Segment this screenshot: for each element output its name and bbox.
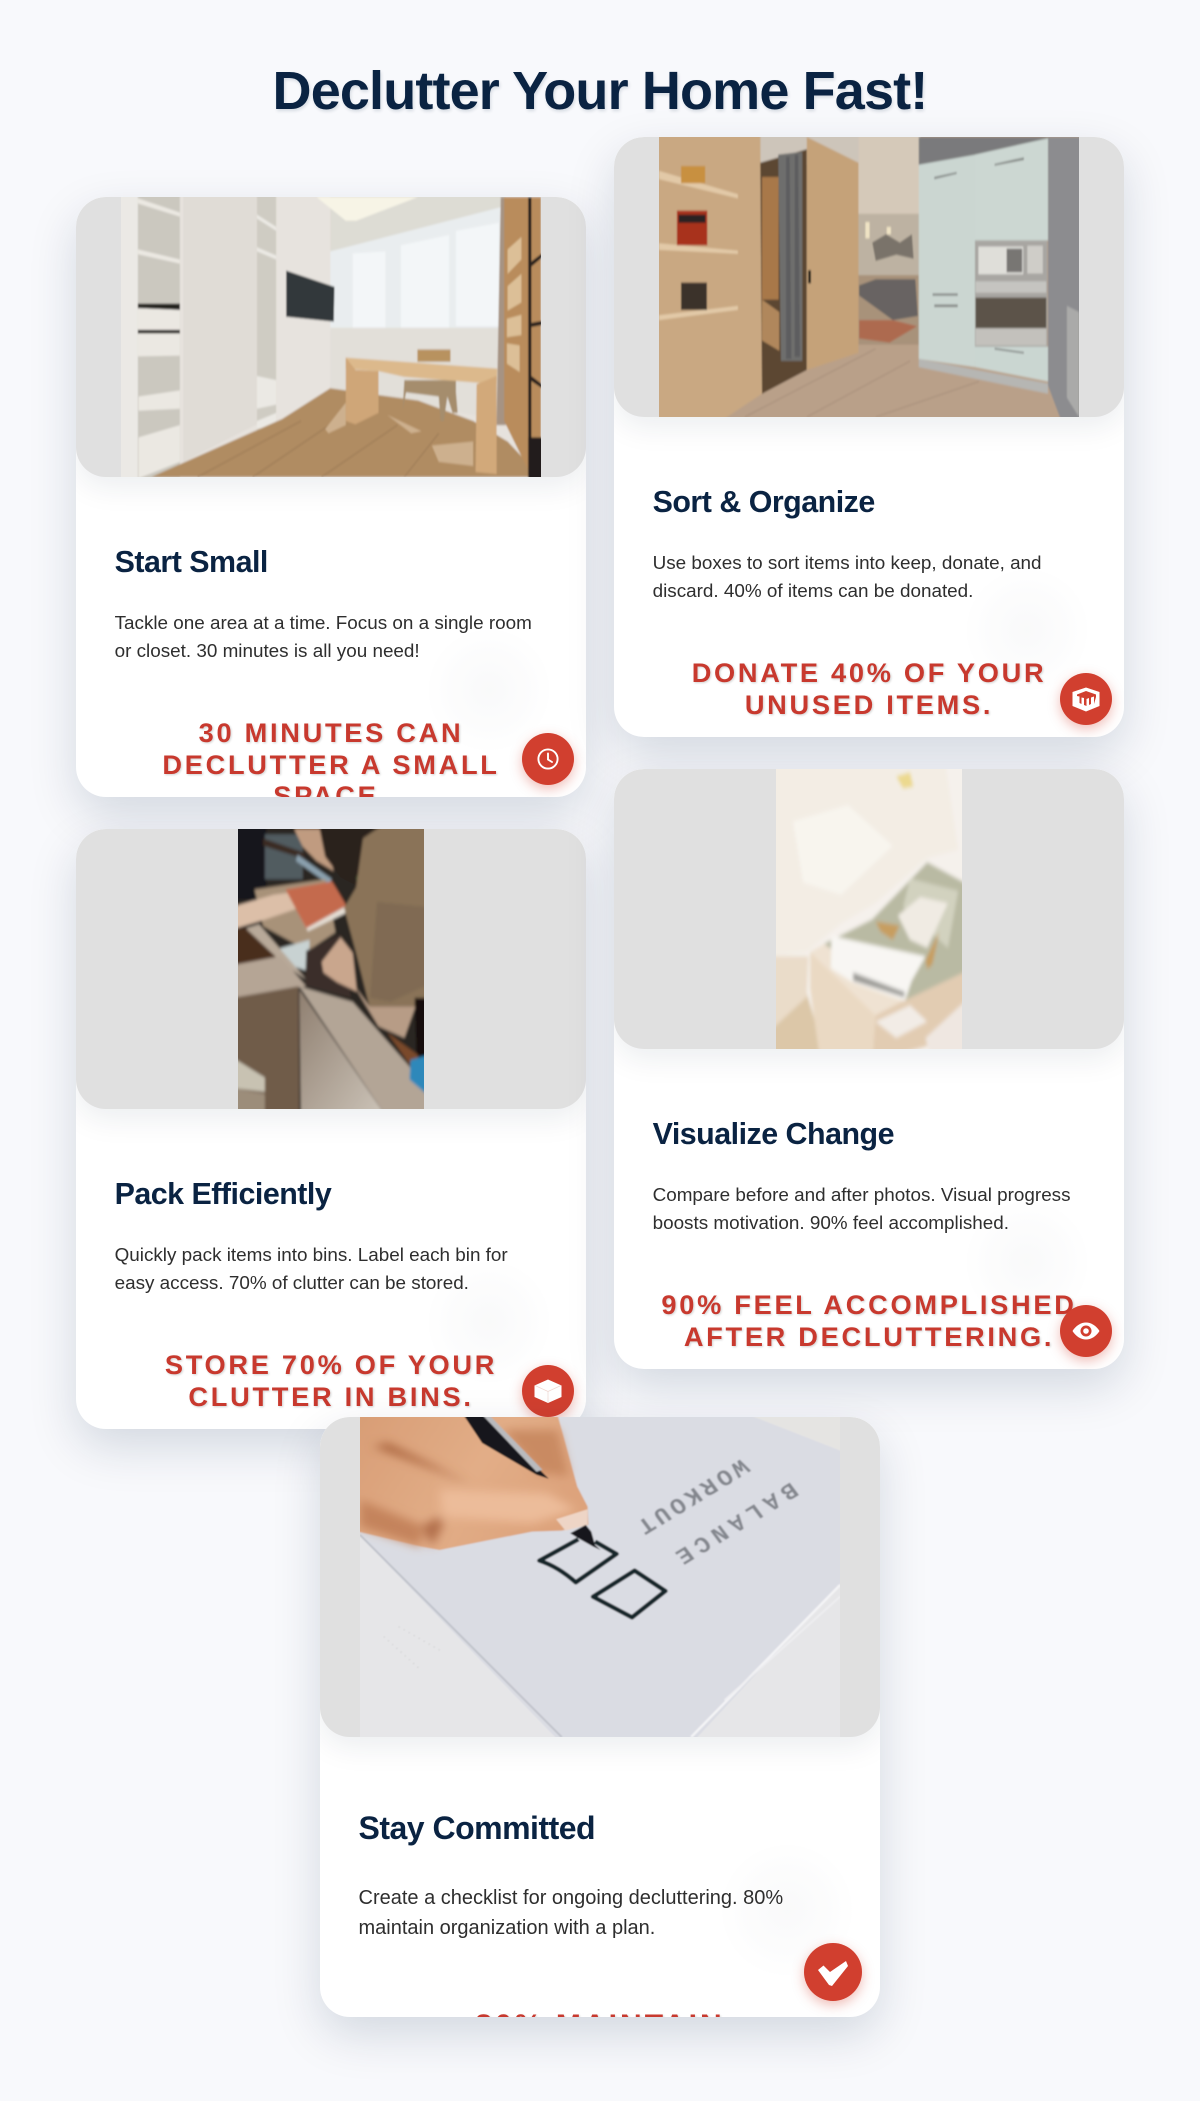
photo: bright room with closet and desk [76, 197, 586, 477]
heading: Pack Efficiently [115, 1177, 331, 1211]
icon: clock [522, 733, 574, 785]
heading: Start Small [115, 545, 268, 579]
callout [692, 657, 1046, 720]
body text [653, 552, 1042, 601]
panel: stay committed [320, 1417, 880, 2017]
photo: wooden partition and kitchen [614, 137, 1124, 417]
photo: hand drawing checkboxes on paper [320, 1417, 880, 1737]
panel: pack efficiently [76, 829, 586, 1429]
body text [115, 1244, 508, 1293]
callout: STORE 70% OF YOUR [165, 1349, 497, 1380]
callout: DONATE 40% OF YOUR [692, 657, 1046, 688]
panel: sort and organize [614, 137, 1124, 737]
printed word on paper: workout: WORKOUT [628, 1452, 753, 1540]
callout [661, 1289, 1077, 1352]
body text: Compare before and after photos. Visual progress [653, 1184, 1071, 1205]
callout [165, 1349, 497, 1412]
photo: wrapped package in plastic [614, 769, 1124, 1049]
printed word on paper: balance: BALANCE [664, 1476, 802, 1571]
icon: eye [1060, 1305, 1112, 1357]
decorative glow behind badge [424, 625, 554, 755]
panel: start small [76, 197, 586, 797]
panel: visualize change [614, 769, 1124, 1369]
body text: easy access. 70% of clutter can be stored. [115, 1272, 469, 1293]
decorative glow behind badge [962, 565, 1092, 695]
callout: CLUTTER IN BINS. [188, 1381, 474, 1412]
callout [162, 717, 500, 797]
body text [358, 1887, 783, 1939]
body text: Tackle one area at a time. Focus on a single room [115, 612, 532, 633]
callout: 30 MINUTES CAN [199, 717, 463, 748]
body text [115, 612, 532, 661]
callout: DECLUTTER A SMALL [162, 749, 500, 780]
body text: or closet. 30 minutes is all you need! [115, 640, 420, 661]
callout: UNUSED ITEMS. [745, 689, 993, 720]
decorative glow behind badge [962, 1197, 1092, 1327]
body text: discard. 40% of items can be donated. [653, 580, 973, 601]
decorative glow behind badge [717, 1840, 857, 1980]
body text: boosts motivation. 90% feel accomplished. [653, 1212, 1009, 1233]
title: Declutter Your Home Fast! [273, 61, 927, 121]
body text [653, 1184, 1071, 1233]
decorative glow behind badge [424, 1257, 554, 1387]
heading: Sort & Organize [653, 485, 875, 519]
icon: check mark [804, 1943, 862, 2001]
body text: Quickly pack items into bins. Label each bin for [115, 1244, 508, 1265]
icon: closed box [522, 1365, 574, 1417]
icon: box with stripes [1060, 673, 1112, 725]
callout: AFTER DECLUTTERING. [684, 1321, 1054, 1352]
callout: 90% FEEL ACCOMPLISHED [661, 1289, 1077, 1320]
photo: man packing books into boxes [76, 829, 586, 1109]
body text: Use boxes to sort items into keep, donate, and [653, 552, 1042, 573]
body text: Create a checklist for ongoing decluttering. 80% [358, 1887, 783, 1909]
heading: Stay Committed [358, 1810, 595, 1846]
heading: Visualize Change [653, 1117, 894, 1151]
body text: maintain organization with a plan. [358, 1917, 655, 1939]
